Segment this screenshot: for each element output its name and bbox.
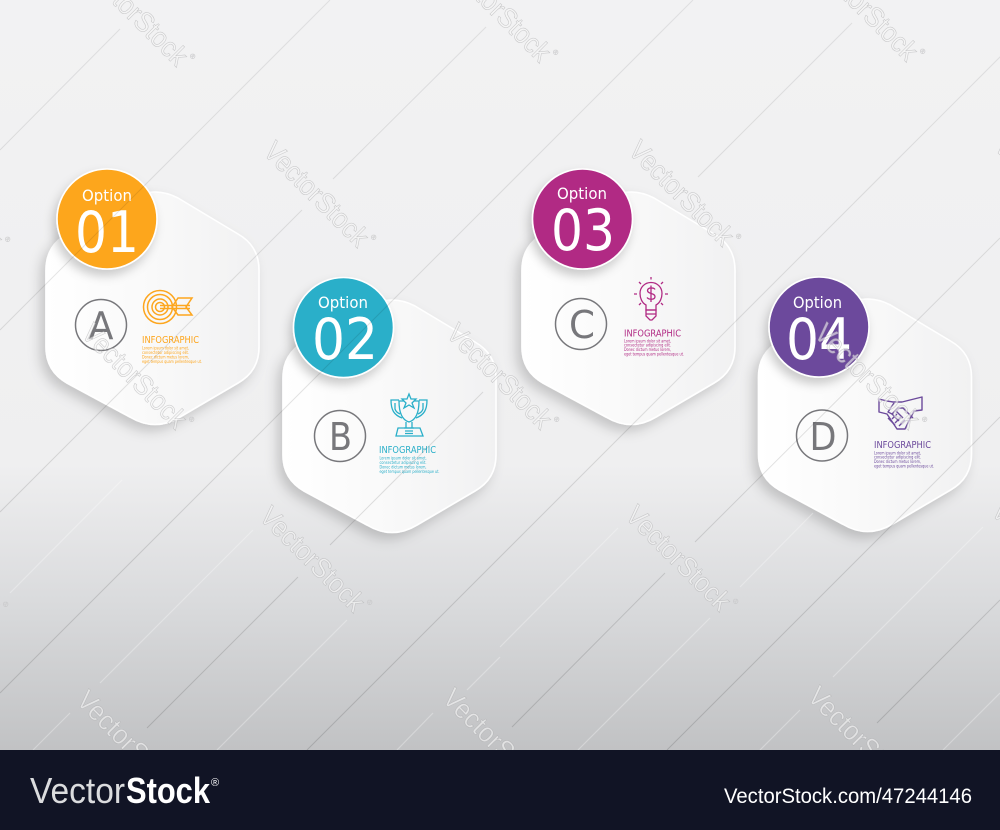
text block D: Lorem ipsum dolor sit amet, [874, 450, 921, 456]
hexagon card A [46, 192, 259, 424]
letter A: A [88, 304, 114, 348]
watermarks: ® [188, 52, 198, 62]
watermarks: VectorStock [254, 500, 372, 618]
text block B: consectetur adipiscing elit. [380, 460, 426, 465]
letter D [796, 410, 848, 461]
watermarks: VectorStock [623, 134, 741, 252]
watermarks: VectorStock [437, 682, 555, 800]
hexagon card C [522, 192, 735, 424]
watermarks: ® [551, 48, 561, 58]
text block D: INFOGRAPHIC [874, 440, 931, 451]
text block D: consectetur adipiscing elit. [874, 454, 921, 460]
letter C [556, 298, 606, 350]
text block A: Lorem ipsum dolor sit amet, [142, 346, 189, 350]
text block B [379, 445, 440, 474]
icon: target with arrow [144, 290, 192, 324]
option badge 03 [532, 169, 632, 269]
watermarks: ® [365, 598, 375, 608]
text block D: Donec dictum metus lorem, [874, 459, 921, 464]
text block C: Lorem ipsum dolor sit amet, [624, 338, 671, 344]
letter B: B [329, 415, 352, 459]
panel 2: option 02 [283, 278, 496, 532]
letter B [314, 410, 366, 462]
panel 4: option 04 [758, 277, 972, 532]
watermarks: ® [552, 415, 562, 425]
option badge 02: 02 [312, 307, 378, 373]
watermarks: ® [918, 47, 928, 57]
option badge 01: Option [82, 186, 132, 205]
text block A: Donec dictum metus lorem, [142, 354, 189, 359]
letter A [76, 300, 126, 350]
watermarks: ® [920, 415, 930, 425]
text block B: INFOGRAPHIC [379, 445, 436, 456]
option badge 04: Option [793, 293, 842, 312]
footer logo [30, 770, 219, 811]
watermarks: ® [734, 232, 744, 242]
text block C: Donec dictum metus lorem, [624, 347, 671, 352]
option badge 02: Option [318, 293, 368, 312]
text block C: consectetur adipiscing elit. [624, 342, 671, 348]
footer logo: ® [211, 777, 219, 789]
option badge 02 [294, 278, 394, 378]
watermarks: VectorStock [258, 135, 376, 253]
panel 3: option 03 [522, 169, 735, 424]
watermarks: VectorStock [809, 317, 927, 435]
panel 1: option 01 [46, 169, 259, 424]
text block A: eget tempus quam pellentesque ut. [142, 359, 202, 364]
text block A: INFOGRAPHIC [142, 335, 199, 346]
icon: handshake [879, 397, 922, 429]
text block C [624, 328, 684, 356]
text block D: eget tempus quam pellentesque ut. [874, 464, 934, 468]
text block A: consectetur adipiscing elit. [142, 350, 189, 355]
text block B: eget tempus quam pellentesque ut. [380, 469, 440, 474]
watermarks: ® [3, 235, 13, 245]
icon: trophy [391, 394, 427, 436]
text block B: Donec dictum metus lorem, [380, 464, 426, 469]
text block C: eget tempus quam pellentesque ut. [624, 352, 684, 356]
text block B: Lorem ipsum dolor sit amet, [380, 456, 426, 460]
watermarks: VectorStock [802, 680, 920, 798]
hexagon card B [283, 300, 496, 532]
watermarks: ® [1, 600, 11, 610]
option badge 04: 04 [786, 307, 852, 373]
icon: light bulb with dollar [634, 277, 668, 320]
letter D: D [810, 415, 836, 459]
option badge 03: Option [557, 184, 607, 203]
text block C: INFOGRAPHIC [624, 328, 681, 340]
watermarks: ® [731, 597, 741, 607]
text block A [142, 335, 202, 364]
watermarks: VectorStock [71, 684, 189, 802]
option badge 01 [57, 169, 157, 269]
option badge 01: 01 [75, 200, 139, 266]
footer image id: VectorStock.com/47244146 [724, 785, 972, 808]
text block D [874, 440, 934, 468]
watermarks: ® [369, 233, 379, 243]
letter C: C [569, 303, 595, 347]
watermarks: VectorStock [441, 317, 559, 435]
option badge 04 [769, 277, 869, 377]
footer logo: Stock [126, 770, 211, 811]
watermarks: ® [187, 415, 197, 425]
footer logo: Vector [30, 770, 125, 811]
footer bar [0, 750, 1000, 830]
option badge 03: 03 [551, 198, 615, 264]
watermarks: VectorStock [620, 499, 738, 617]
hexagon card D [758, 299, 972, 532]
watermarks: VectorStock [76, 317, 194, 435]
